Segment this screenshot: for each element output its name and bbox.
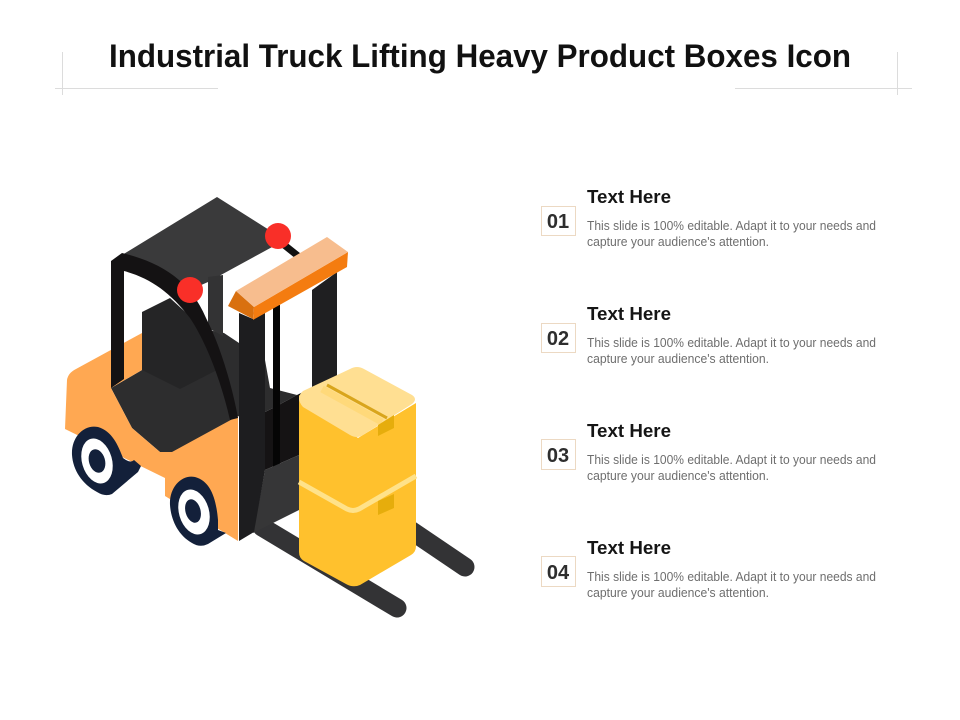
roof xyxy=(122,197,285,290)
item 01 xyxy=(542,187,876,249)
rear mast xyxy=(312,272,337,392)
item 03: capture your audience's attention. xyxy=(587,469,769,483)
item 01: capture your audience's attention. xyxy=(587,235,769,249)
item 03: Text Here xyxy=(587,421,671,441)
item 01: Text Here xyxy=(587,187,671,207)
item 01: 01 xyxy=(547,211,569,233)
fork: front xyxy=(262,527,397,608)
front left cabin post and arc xyxy=(111,253,238,420)
tape: upper box xyxy=(378,415,394,436)
fork: rear xyxy=(400,523,465,567)
wheel: rear xyxy=(72,427,141,495)
item 03: This slide is 100% editable. Adapt it to your needs and xyxy=(587,453,876,467)
title: Industrial Truck Lifting Heavy Product Boxes Icon xyxy=(109,38,851,74)
item 03 xyxy=(542,421,876,483)
cross bar: front face xyxy=(253,252,348,320)
box seam xyxy=(299,476,416,510)
seat floor xyxy=(111,330,239,453)
cross bar: top face xyxy=(236,237,348,307)
orange truck body xyxy=(65,333,238,541)
seat xyxy=(142,298,217,389)
tape stripe on top xyxy=(327,385,387,418)
carriage floor xyxy=(265,360,297,412)
red light: left xyxy=(177,277,203,303)
item 04: This slide is 100% editable. Adapt it to your needs and xyxy=(587,570,876,584)
item 03: 03 xyxy=(547,445,569,467)
thin mast bar xyxy=(273,305,280,470)
rear cabin post xyxy=(208,275,223,336)
item 04 xyxy=(542,538,876,600)
item 02: Text Here xyxy=(587,304,671,324)
tape: lower box xyxy=(378,494,394,515)
item 04: 04 xyxy=(547,562,570,584)
wheel: front xyxy=(170,477,226,546)
carriage wedge xyxy=(253,455,299,533)
upper box top face xyxy=(299,367,415,437)
light stem xyxy=(283,244,298,256)
item 04: Text Here xyxy=(587,538,671,558)
front mast xyxy=(239,313,265,541)
item 02: capture your audience's attention. xyxy=(587,352,769,366)
tape band on top xyxy=(322,389,382,422)
upper box xyxy=(299,395,416,513)
illustration: forklift lifting boxes xyxy=(65,197,465,608)
cross bar: left face xyxy=(228,291,254,319)
red light: right xyxy=(265,223,291,249)
item 02: This slide is 100% editable. Adapt it to your needs and xyxy=(587,336,876,350)
item 04: capture your audience's attention. xyxy=(587,586,769,600)
item 01: This slide is 100% editable. Adapt it to your needs and xyxy=(587,219,876,233)
item 02 xyxy=(542,304,876,366)
mast back panel xyxy=(265,375,337,470)
item 02: 02 xyxy=(547,328,569,350)
lower box xyxy=(299,478,416,586)
